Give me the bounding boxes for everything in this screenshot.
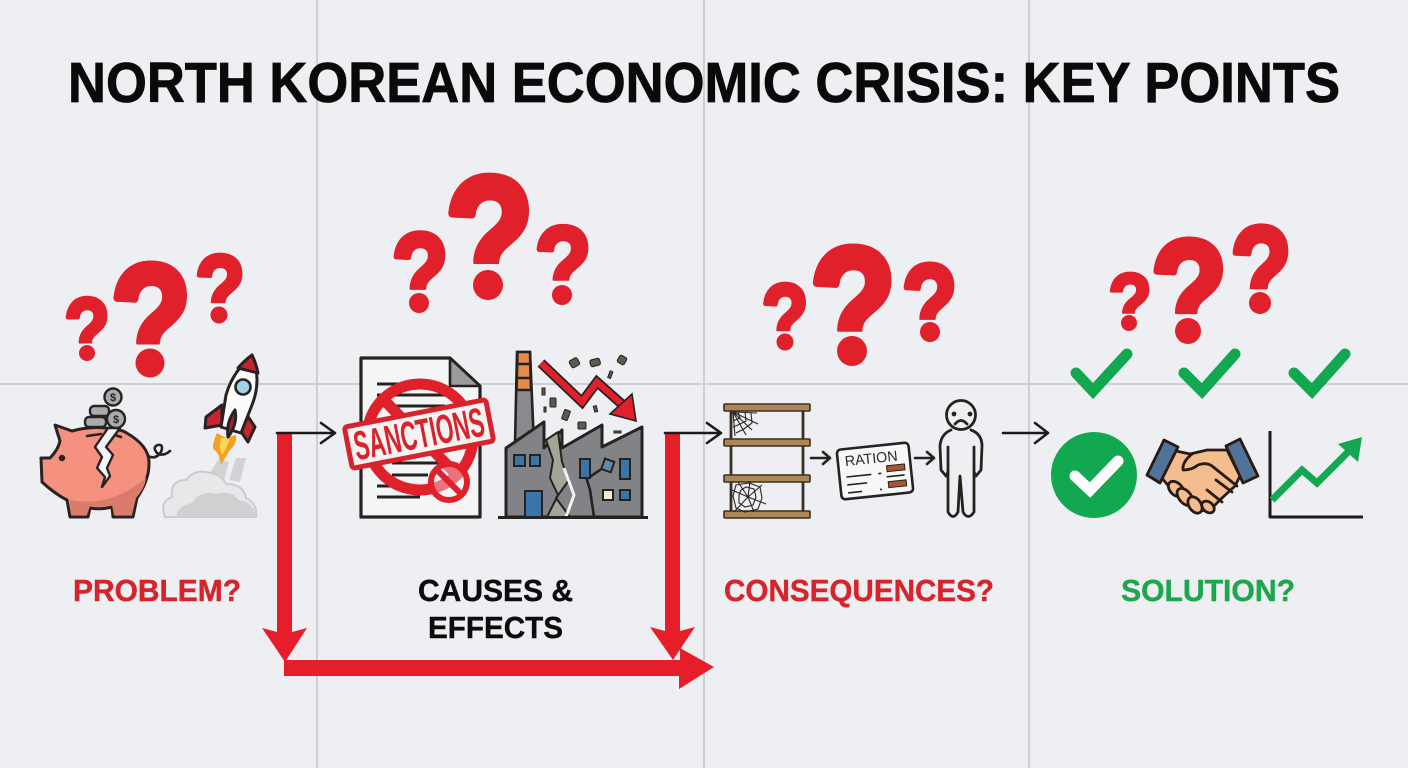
question marks: causes — [394, 172, 588, 313]
icon: broken piggy bank — [41, 388, 170, 517]
icon: green check circle — [1051, 432, 1137, 518]
arrow: causes to consequences — [650, 423, 721, 660]
question marks: problem: ? — [195, 235, 245, 342]
arrow: horizontal red bypass — [284, 648, 714, 689]
label: problem: PROBLEM? — [73, 573, 241, 608]
label: solution: SOLUTION? — [1121, 573, 1295, 608]
question marks: consequences — [763, 244, 954, 366]
label: causes and effects: CAUSES & — [418, 573, 573, 608]
arrow: shelves to ration — [811, 452, 830, 464]
question marks: consequences: ? — [810, 213, 896, 400]
icon: sanctions document — [344, 358, 494, 517]
title: NORTH KOREAN ECONOMIC CRISIS: KEY POINTS — [68, 51, 1340, 115]
question marks: causes: ? — [445, 142, 534, 335]
arrow: ration to person — [915, 452, 934, 464]
icon: ration card: RATION — [844, 449, 898, 470]
icon: ration card — [837, 442, 913, 500]
panel: causes and effects — [344, 142, 648, 645]
question marks: consequences: ? — [902, 243, 957, 365]
panel: solution — [1051, 201, 1363, 608]
icon: broken piggy bank: $ — [113, 414, 119, 426]
icon: rocket launch — [163, 355, 258, 517]
panel: problem — [41, 232, 258, 608]
question marks: problem: ? — [111, 232, 191, 409]
question marks: solution: ? — [1151, 209, 1227, 374]
green check marks — [1076, 354, 1345, 391]
icon: broken piggy bank: $ — [110, 392, 116, 404]
question marks: solution: ? — [1108, 259, 1152, 347]
icon: sad person — [940, 400, 982, 516]
label: causes and effects — [418, 573, 573, 645]
arrow: problem to causes — [262, 423, 335, 662]
icon: rising chart — [1270, 431, 1363, 517]
arrow: consequences to solution — [1003, 423, 1048, 443]
icon: handshake — [1147, 439, 1258, 516]
label: consequences: CONSEQUENCES? — [724, 573, 994, 608]
question marks: causes: ? — [392, 211, 448, 336]
question marks: consequences: ? — [761, 265, 809, 370]
icon: sanctions document: SANCTIONS — [350, 399, 488, 469]
icon: collapsing factory — [498, 352, 648, 518]
question marks: causes: ? — [535, 205, 591, 325]
question marks: problem: ? — [64, 280, 110, 381]
label: causes and effects: EFFECTS — [428, 610, 563, 645]
panel: consequences — [724, 213, 994, 608]
question marks: solution — [1110, 223, 1288, 344]
question marks: problem — [66, 252, 242, 378]
icon: empty shelves with cobwebs — [724, 404, 810, 518]
question marks: solution: ? — [1230, 201, 1292, 340]
